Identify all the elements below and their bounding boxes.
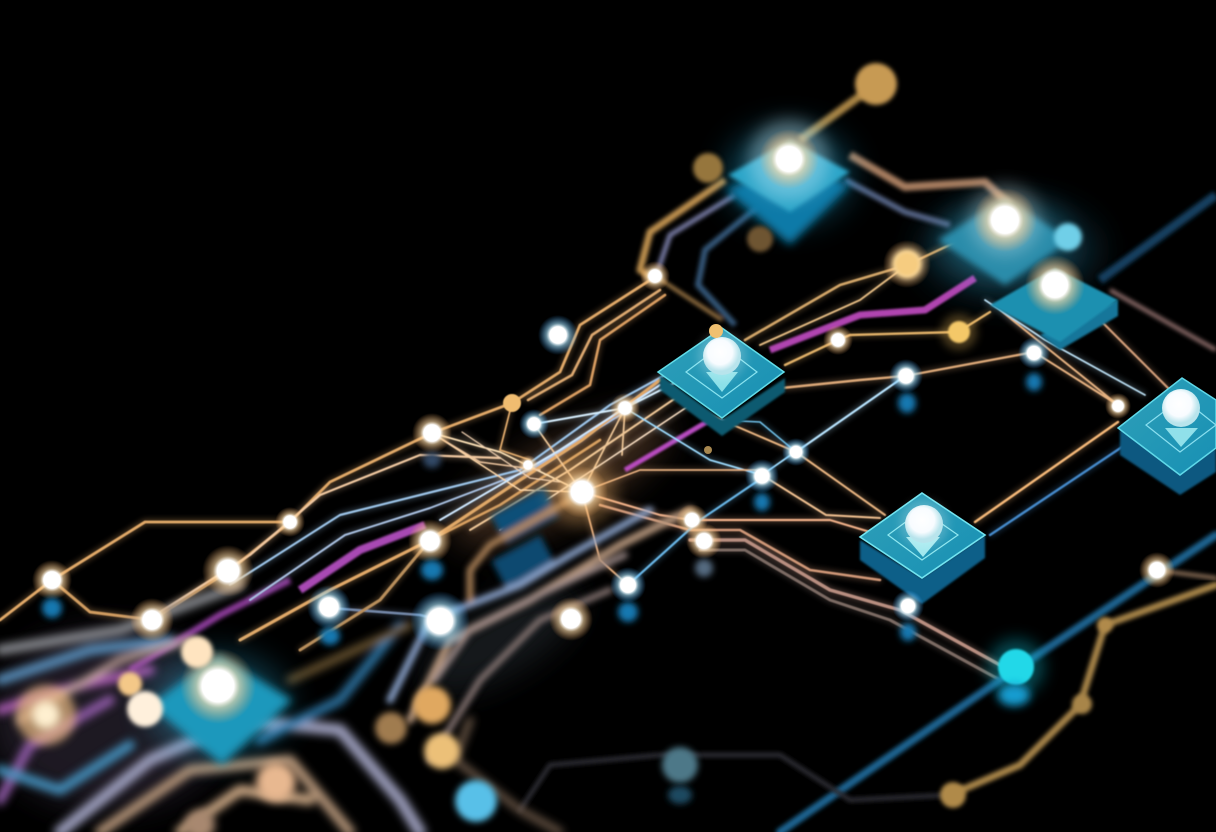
chip: bottom left, out of focus [148, 648, 292, 765]
chip: right of upper [990, 255, 1118, 350]
traces: magenta highlights [130, 278, 975, 670]
nodes: cool white-blue glowing [307, 315, 1050, 651]
chip: centre [658, 328, 785, 436]
nodes: out-of-focus foreground [16, 636, 698, 832]
nodes: warm glowing [32, 240, 1175, 642]
chip: upper right [938, 184, 1082, 285]
chip: far right [1118, 378, 1216, 495]
traces: main gold and blue lines, glow layer [0, 240, 1170, 680]
traces: main gold and blue lines [0, 240, 1170, 680]
chip: lower centre [860, 493, 985, 604]
traces: lower right foreground [520, 535, 1216, 832]
chip: top centre [726, 120, 851, 245]
traces: blurred thick lower middle [390, 488, 690, 760]
ambient glow [0, 200, 1100, 810]
nodes: teal end node [988, 639, 1044, 706]
reflections beneath nodes [42, 373, 1042, 804]
traces: far upper right, soft [640, 85, 1216, 350]
nodes: out-of-focus gold [693, 63, 1113, 808]
traces: blurred bottom left foreground [0, 585, 560, 832]
